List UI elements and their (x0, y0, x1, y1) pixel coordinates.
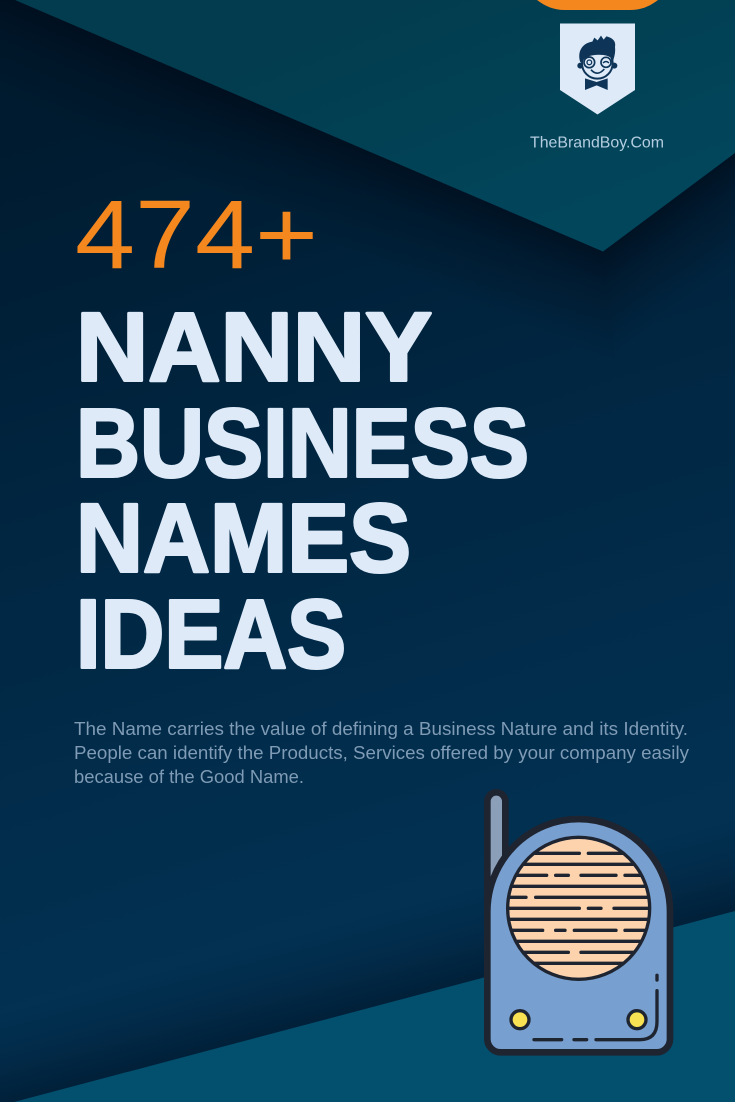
icon: baby monitor (487, 792, 670, 1052)
description text: People can identify the Products, Services offered by your company easily (74, 743, 689, 763)
speaker grille (503, 837, 653, 979)
bottom teal panel (14, 911, 735, 1102)
left button (511, 1011, 529, 1029)
title: IDEAS (76, 580, 346, 688)
count 474+: 474+ (75, 180, 318, 289)
orange tab (537, 0, 658, 10)
top teal chevron panel (15, 0, 735, 252)
monitor body (487, 819, 670, 1052)
title: BUSINESS (76, 388, 529, 498)
logo badge (560, 24, 635, 114)
title: NANNY (76, 292, 432, 402)
brand name: TheBrandBoy.Com (530, 134, 664, 152)
right button (628, 1011, 646, 1029)
antenna (487, 792, 505, 920)
title: NAMES (76, 484, 411, 592)
description text: The Name carries the value of defining a Business Nature and its Identity. (74, 719, 688, 739)
icon: boy with glasses and bow tie (577, 36, 617, 90)
title (76, 292, 529, 688)
description text: because of the Good Name. (74, 767, 304, 787)
description text (74, 719, 689, 787)
body highlight lines (534, 975, 657, 1040)
